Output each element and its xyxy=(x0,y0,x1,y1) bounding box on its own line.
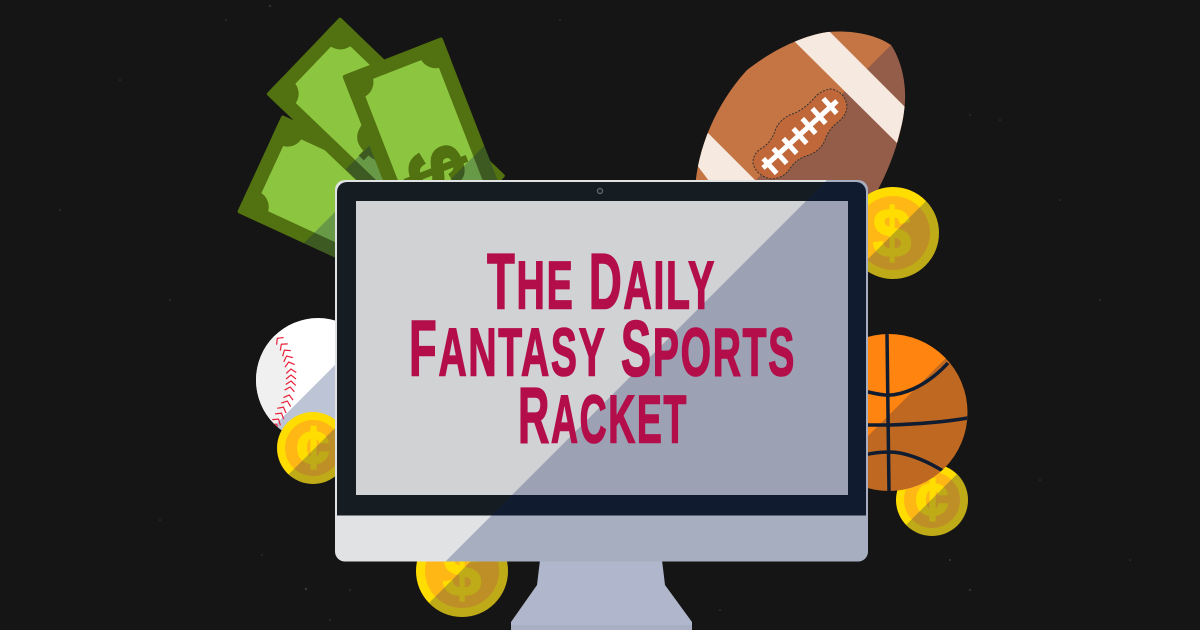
icon: basketball xyxy=(868,334,968,491)
icon: bill top xyxy=(266,18,505,180)
title xyxy=(409,236,796,460)
icon: baseball xyxy=(256,318,335,430)
icon: cent coin right: ¢ xyxy=(915,466,949,533)
icon: bill left xyxy=(238,116,356,258)
icon: dollar coin top right xyxy=(868,187,939,279)
icon: cent coin right xyxy=(896,466,968,536)
icon: bill front xyxy=(342,38,498,180)
title: THE DAILY xyxy=(487,236,716,326)
icon: bill top: $ xyxy=(339,88,430,180)
screen xyxy=(356,201,848,495)
title: FANTASY SPORTS xyxy=(409,304,796,392)
icon: cent coin left xyxy=(277,412,335,484)
icon: camera xyxy=(598,188,602,194)
icon: dollar coin top right: $ xyxy=(873,194,911,272)
icon: cent coin left: ¢ xyxy=(296,414,330,481)
icon: bill front: $ xyxy=(388,134,486,206)
icon: monitor stand xyxy=(511,560,692,630)
icon: dollar coin bottom: $ xyxy=(443,533,481,611)
icon: stack of dollar bills xyxy=(238,18,505,258)
panel: monitor xyxy=(335,175,900,565)
icon: football xyxy=(694,30,906,200)
title: RACKET xyxy=(518,370,688,460)
icon: dollar coin bottom xyxy=(416,562,508,617)
